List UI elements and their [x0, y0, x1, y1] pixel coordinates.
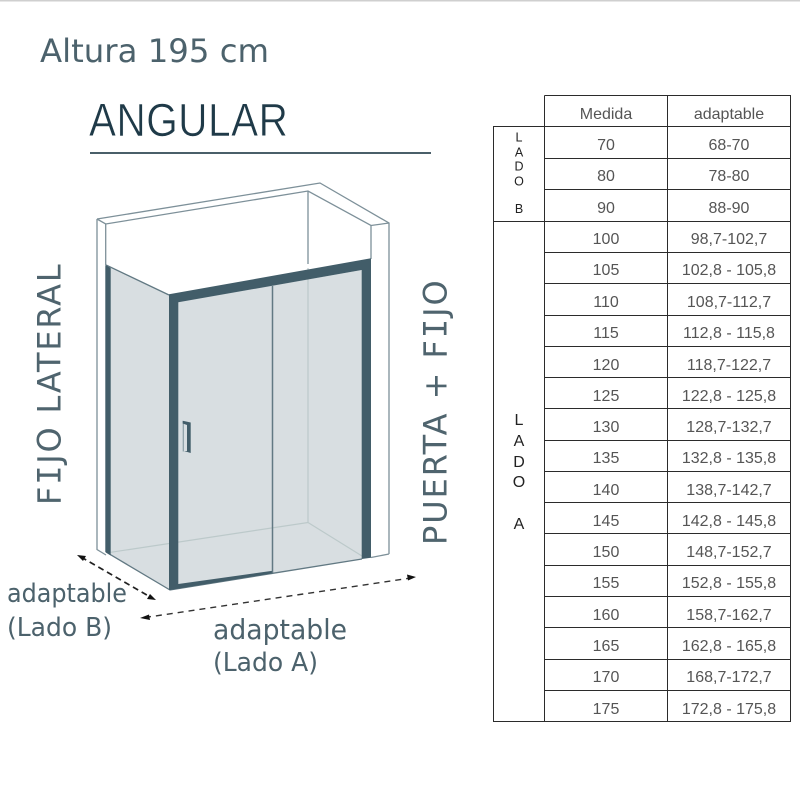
table rows: 70: [597, 137, 615, 154]
table rows: 160: [593, 607, 619, 624]
table rows: 108,7-112,7: [687, 294, 771, 311]
shower enclosure diagram: [77, 183, 416, 620]
table rows: 118,7-122,7: [687, 357, 771, 374]
side label: puerta + fijo: PUERTA + FIJO: [417, 278, 455, 545]
height label: Altura 195 cm: [40, 32, 269, 70]
row label: Lado A: O: [513, 474, 525, 491]
side panel profile: [105, 265, 111, 556]
size table: [494, 96, 790, 722]
table rows: 142,8 - 145,8: [682, 513, 776, 530]
row label: Lado A: L: [515, 412, 524, 429]
table rows: 145: [593, 513, 619, 530]
table rows: 165: [593, 638, 619, 655]
table rows: [593, 137, 776, 718]
table rows: 98,7-102,7: [691, 231, 767, 248]
title: ANGULAR: [89, 96, 288, 147]
table rows: 158,7-162,7: [686, 607, 772, 624]
table rows: 132,8 - 135,8: [682, 450, 776, 467]
table rows: 100: [593, 231, 619, 248]
table rows: 80: [597, 168, 615, 185]
row label: Lado A: [513, 412, 525, 533]
table rows: 88-90: [709, 200, 750, 217]
row label: Lado A: A: [514, 516, 525, 533]
table rows: 125: [593, 388, 619, 405]
door frame: [169, 258, 371, 590]
row label: Lado B: A: [515, 146, 524, 160]
table rows: 175: [593, 701, 619, 718]
table rows: 150: [593, 544, 619, 561]
sliding door divider: [272, 286, 274, 573]
dimension label: Lado A: adaptable: [213, 613, 347, 646]
side label: fijo lateral: FIJO LATERAL: [31, 263, 69, 505]
wall outline: [97, 183, 389, 558]
edges of side panel: [106, 265, 362, 590]
table rows: 115: [593, 325, 619, 342]
back wall and floor lines seen through glass: [111, 268, 362, 556]
side glass panel: [110, 268, 169, 590]
row label: Lado A: A: [514, 433, 525, 450]
front glass panel: [178, 270, 362, 589]
table rows: 130: [593, 419, 619, 436]
table rows: 105: [593, 262, 619, 279]
dimension label: Lado B: (Lado B): [7, 613, 112, 643]
table rows: 68-70: [709, 137, 750, 154]
dimension label: Lado A: [213, 613, 347, 678]
table header: adaptable: [694, 106, 764, 123]
table header: [580, 106, 764, 123]
arrow: Lado B: [77, 555, 156, 600]
table rows: 155: [593, 575, 619, 592]
row label: Lado A: D: [513, 454, 525, 471]
table rows: 140: [593, 482, 619, 499]
table rows: 172,8 - 175,8: [682, 701, 776, 718]
table rows: 102,8 - 105,8: [682, 262, 776, 279]
table rows: 90: [597, 200, 615, 217]
table rows: 148,7-152,7: [686, 544, 772, 561]
arrow: Lado A: [140, 574, 416, 620]
table grid: [494, 96, 790, 722]
table rows: 128,7-132,7: [686, 419, 772, 436]
table rows: 152,8 - 155,8: [682, 575, 776, 592]
row label: Lado B: L: [516, 130, 523, 144]
table rows: 135: [593, 450, 619, 467]
dimension label: Lado B: adaptable: [7, 579, 127, 609]
table rows: 168,7-172,7: [686, 669, 772, 686]
table rows: 110: [593, 294, 619, 311]
door handle: [183, 421, 191, 453]
row label: Lado B: B: [515, 202, 523, 216]
table rows: 170: [593, 669, 619, 686]
dimension label: Lado A: (Lado A): [213, 648, 318, 678]
table rows: 78-80: [709, 168, 750, 185]
dimension label: Lado B: [7, 579, 127, 643]
table rows: 112,8 - 115,8: [683, 325, 775, 342]
table rows: 138,7-142,7: [686, 482, 772, 499]
table rows: 122,8 - 125,8: [682, 388, 776, 405]
table rows: 162,8 - 165,8: [682, 638, 776, 655]
table header: Medida: [580, 106, 632, 123]
row label: Lado B: O: [514, 174, 524, 188]
row label: Lado B: [514, 130, 524, 216]
table rows: 120: [593, 357, 619, 374]
row label: Lado B: D: [514, 160, 524, 174]
